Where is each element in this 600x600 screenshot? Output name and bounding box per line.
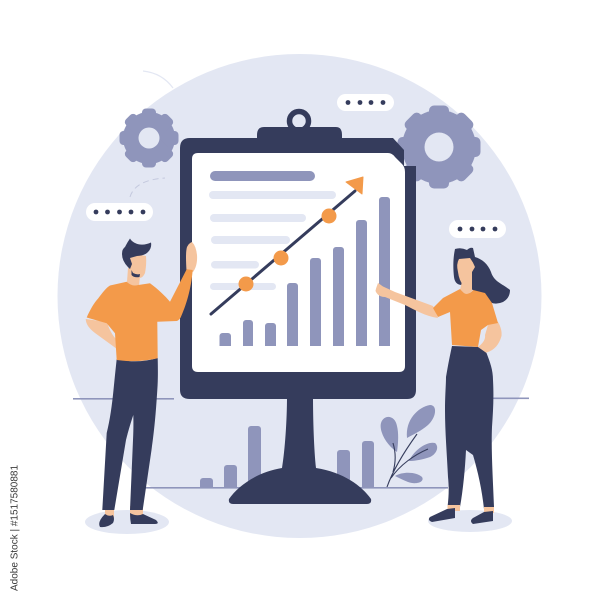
- woman face: [457, 258, 475, 285]
- vertical credit text: Adobe Stock | #1517580881: [10, 465, 20, 591]
- paper sheet: [192, 153, 405, 372]
- icon: right gear: [398, 106, 480, 188]
- man ankles: [105, 506, 143, 518]
- man hair and beard: [122, 238, 151, 277]
- woman ankles: [448, 505, 494, 513]
- woman pointing arm: [376, 283, 438, 318]
- decorative swoosh: [143, 71, 173, 88]
- man sweater: [87, 269, 193, 361]
- horizon line left: [73, 398, 174, 400]
- man shadow: [85, 510, 169, 534]
- woman trousers: [445, 346, 494, 509]
- bar chart: [220, 197, 390, 346]
- man face: [128, 253, 146, 278]
- woman hip arm: [462, 322, 502, 357]
- man raised hand: [186, 242, 197, 272]
- man shoes: [99, 513, 158, 527]
- icon: left gear: [120, 108, 178, 168]
- ground line: [145, 487, 448, 489]
- dotted arc: [130, 178, 165, 197]
- plant: [381, 405, 437, 487]
- man bent forearm: [86, 319, 132, 354]
- speech bubble top: [337, 94, 394, 111]
- woman top: [433, 289, 498, 347]
- woman shadow: [428, 510, 512, 532]
- woman shoes: [429, 508, 493, 524]
- speech bubble right: [449, 220, 506, 238]
- text lines: [209, 171, 336, 290]
- board frame: [180, 138, 416, 399]
- man neck: [127, 268, 140, 287]
- woman figure: [376, 248, 512, 532]
- man figure: [85, 238, 197, 534]
- clip: [257, 112, 342, 140]
- monitor stand: [229, 396, 371, 504]
- horizon line right: [492, 398, 529, 399]
- woman neck: [460, 276, 472, 295]
- woman hair: [453, 248, 510, 304]
- background bars: [200, 426, 374, 488]
- clipboard board: [180, 112, 416, 399]
- speech bubble left: [86, 203, 153, 221]
- man trousers: [102, 358, 158, 510]
- background circle: [58, 54, 542, 538]
- trend arrow: [211, 177, 363, 314]
